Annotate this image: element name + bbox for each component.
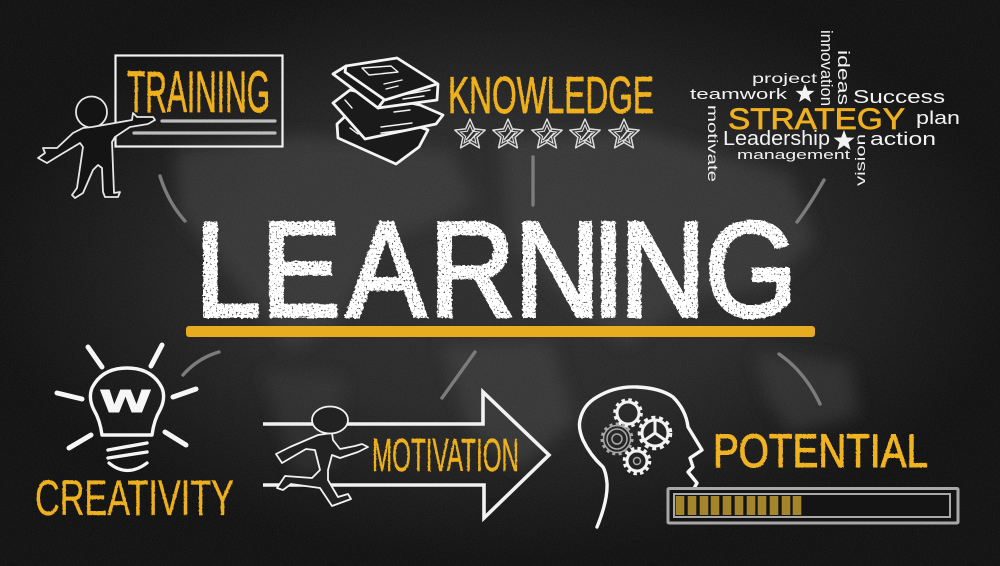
word cloud: strategy xyxy=(690,30,960,186)
progress bar xyxy=(668,488,958,523)
bulb letter w: w xyxy=(100,374,150,421)
gear top xyxy=(615,400,641,426)
gear right xyxy=(640,418,670,448)
heading: CREATIVITY: CREATIVITY xyxy=(35,470,234,526)
gear bottom xyxy=(624,448,650,474)
five star rating xyxy=(455,119,639,148)
word cloud: strategy: innovation xyxy=(817,30,836,106)
gear left xyxy=(602,424,632,454)
heading: POTENTIAL: POTENTIAL xyxy=(713,424,928,477)
connector chalk dashes xyxy=(160,157,824,404)
word cloud: strategy: vision xyxy=(852,134,868,186)
board text lines xyxy=(134,121,275,133)
yellow underline xyxy=(186,326,815,337)
icon: stack of books xyxy=(333,58,443,164)
icon: head with gears xyxy=(579,387,702,527)
icon: light bulb xyxy=(57,345,196,470)
word cloud: strategy: ideas xyxy=(834,50,853,105)
panel: training xyxy=(38,56,282,198)
panel: creativity xyxy=(35,345,234,526)
word cloud: strategy: Leadership xyxy=(723,128,830,150)
icon: running figure xyxy=(276,406,368,506)
icon: presenter figure xyxy=(38,96,155,198)
title: LEARNING: LEARNING xyxy=(195,194,797,345)
panel: motivation xyxy=(263,392,549,518)
heading: KNOWLEDGE: KNOWLEDGE xyxy=(448,67,654,125)
word cloud: strategy: project xyxy=(752,70,817,86)
icon: outlined arrow xyxy=(263,392,549,518)
word cloud: strategy: Success xyxy=(853,87,945,107)
word cloud: strategy: plan xyxy=(916,108,960,128)
heading: MOTIVATION: MOTIVATION xyxy=(372,429,519,481)
word cloud: strategy: STRATEGY xyxy=(728,103,905,136)
word cloud: strategy: management xyxy=(737,147,851,162)
word cloud: strategy: action xyxy=(870,129,936,149)
heading: TRAINING: TRAINING xyxy=(127,60,270,125)
training board xyxy=(116,56,282,146)
panel: knowledge xyxy=(333,58,654,164)
panel: potential xyxy=(579,387,958,527)
word cloud: strategy: teamwork xyxy=(690,86,788,103)
word cloud: strategy: motivate xyxy=(705,105,721,182)
